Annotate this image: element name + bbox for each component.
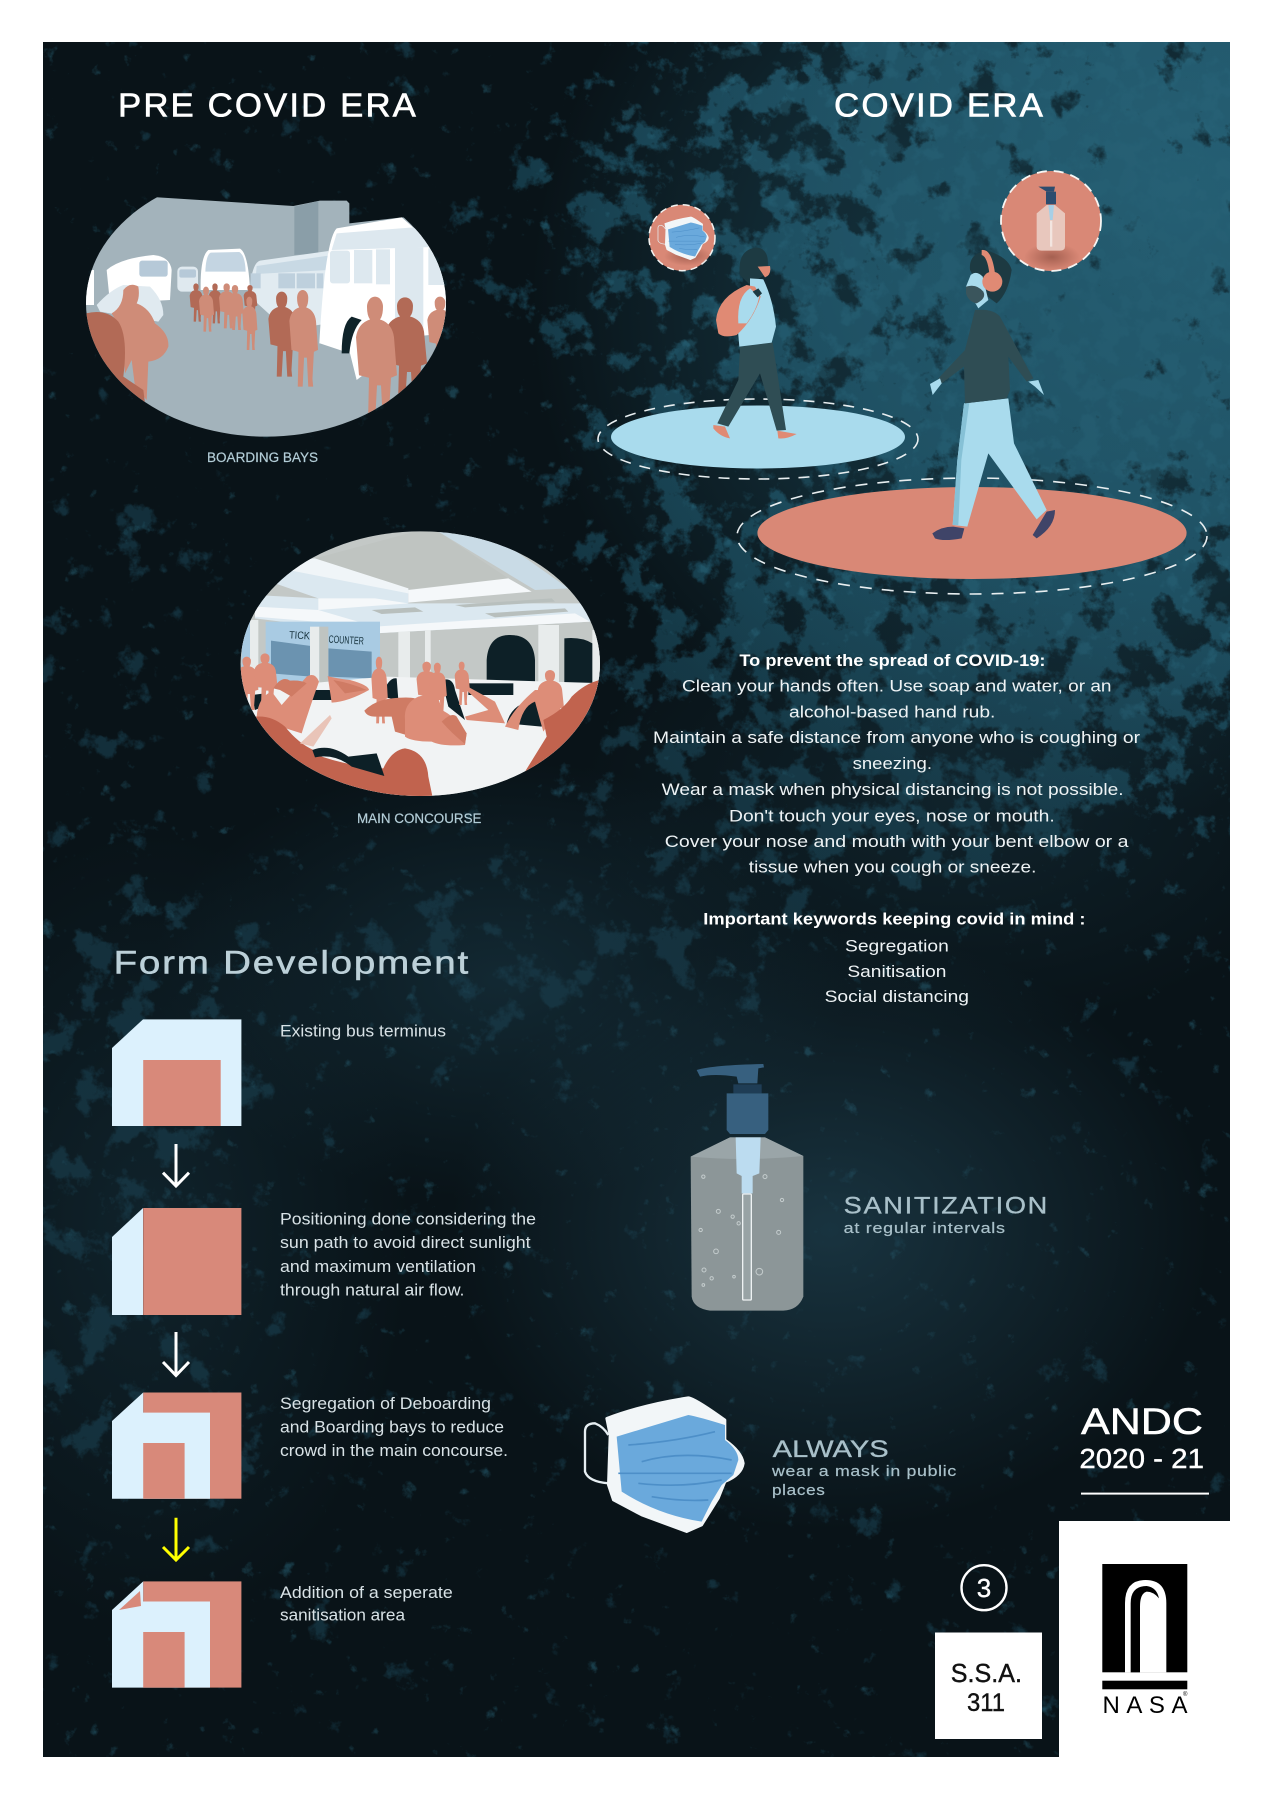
text: step 3: and Boarding bays to reduce xyxy=(280,1419,504,1437)
logo: nasa: ® xyxy=(1183,1691,1188,1698)
illustration: main concourse: TICKI xyxy=(289,629,313,643)
text: step 3: crowd in the main concourse. xyxy=(280,1442,508,1460)
text: step 2: sun path to avoid direct sunlight xyxy=(280,1234,531,1252)
diagram: step 3 xyxy=(112,1392,241,1499)
label: sanitization: at regular intervals xyxy=(844,1220,1006,1237)
heading: form development: Form Development xyxy=(114,944,470,980)
sheet label box: S.S.A. xyxy=(951,1658,1022,1688)
caption: main concourse: MAIN CONCOURSE xyxy=(357,811,482,826)
logo: nasa: NASA xyxy=(1102,1692,1188,1719)
social distance disc: salmon xyxy=(737,478,1207,594)
page number xyxy=(962,1565,1006,1610)
text: step 2 xyxy=(280,1210,536,1300)
text: step 1: Existing bus terminus xyxy=(280,1023,446,1041)
text block: covid prevention: sneezing. xyxy=(853,754,932,773)
text block: keywords: Important keywords keeping covid in mind : xyxy=(703,911,1086,929)
text block: covid prevention: Maintain a safe distance from anyone who is coughing or xyxy=(653,728,1140,747)
label: andc year: 2020 - 21 xyxy=(1079,1443,1204,1474)
logo: nasa xyxy=(1102,1564,1188,1719)
label: andc year: ANDC xyxy=(1081,1401,1203,1442)
icon: surgical mask xyxy=(585,1398,743,1532)
label: always wear a mask xyxy=(771,1436,957,1499)
icon: sanitizer bottle xyxy=(691,1064,803,1311)
text: step 3 xyxy=(280,1395,508,1460)
text block: keywords: Social distancing xyxy=(825,987,969,1006)
figure: man walking xyxy=(930,250,1055,540)
text: step 3: Segregation of Deboarding xyxy=(280,1395,491,1413)
sheet label box: 311 xyxy=(967,1689,1005,1717)
notch: white corner xyxy=(1059,1521,1230,1757)
page number: 3 xyxy=(977,1573,991,1603)
social distance disc: blue xyxy=(598,399,918,479)
text block: covid prevention xyxy=(653,652,1140,877)
label: sanitization: SANITIZATION xyxy=(844,1192,1049,1219)
text: step 2: through natural air flow. xyxy=(280,1282,464,1300)
diagram: step 4 xyxy=(112,1581,241,1688)
diagram: step 1 xyxy=(112,1019,241,1126)
text block: keywords xyxy=(703,911,1086,1006)
sheet label box xyxy=(935,1632,1042,1739)
figure: woman walking xyxy=(713,247,797,438)
text block: covid prevention: alcohol-based hand rub. xyxy=(789,703,995,722)
title: pre covid era: PRE COVID ERA xyxy=(118,86,418,124)
label: sanitization xyxy=(844,1192,1049,1237)
text: step 2: and maximum ventilation xyxy=(280,1258,476,1276)
text: step 2: Positioning done considering the xyxy=(280,1210,536,1228)
text block: keywords: Segregation xyxy=(845,937,949,956)
title: covid era: COVID ERA xyxy=(834,86,1045,124)
text block: covid prevention: Clean your hands often. Use soap and water, or an xyxy=(682,677,1112,696)
text block: covid prevention: Don't touch your eyes, nose or mouth. xyxy=(729,806,1055,826)
text block: covid prevention: Wear a mask when physical distancing is not possible. xyxy=(662,780,1124,799)
text: step 4 xyxy=(280,1584,453,1624)
text: step 4: Addition of a seperate xyxy=(280,1584,453,1602)
illustration: main concourse xyxy=(235,520,608,803)
label: always wear a mask: places xyxy=(772,1482,826,1499)
arrow: step 2 to 3 xyxy=(163,1332,189,1376)
icon: sanitizer badge xyxy=(1001,171,1101,271)
arrow: step 3 to 4 xyxy=(163,1518,189,1560)
caption: boarding bays: BOARDING BAYS xyxy=(207,450,318,465)
text block: covid prevention: Cover your nose and mouth with your bent elbow or a xyxy=(665,832,1129,851)
text block: covid prevention: tissue when you cough or sneeze. xyxy=(749,858,1036,877)
illustration: boarding bays xyxy=(86,197,446,437)
text: step 4: sanitisation area xyxy=(280,1606,406,1624)
illustration: main concourse: COUNTER xyxy=(328,634,364,648)
label: always wear a mask: wear a mask in public xyxy=(771,1463,957,1480)
text block: keywords: Sanitisation xyxy=(847,962,946,981)
label: always wear a mask: ALWAYS xyxy=(773,1436,889,1463)
diagram: step 2 xyxy=(112,1208,241,1315)
arrow: step 1 to 2 xyxy=(163,1144,189,1186)
label: andc year xyxy=(1079,1401,1209,1495)
icon: mask badge xyxy=(649,205,715,271)
text block: covid prevention: To prevent the spread of COVID-19: xyxy=(739,652,1045,670)
